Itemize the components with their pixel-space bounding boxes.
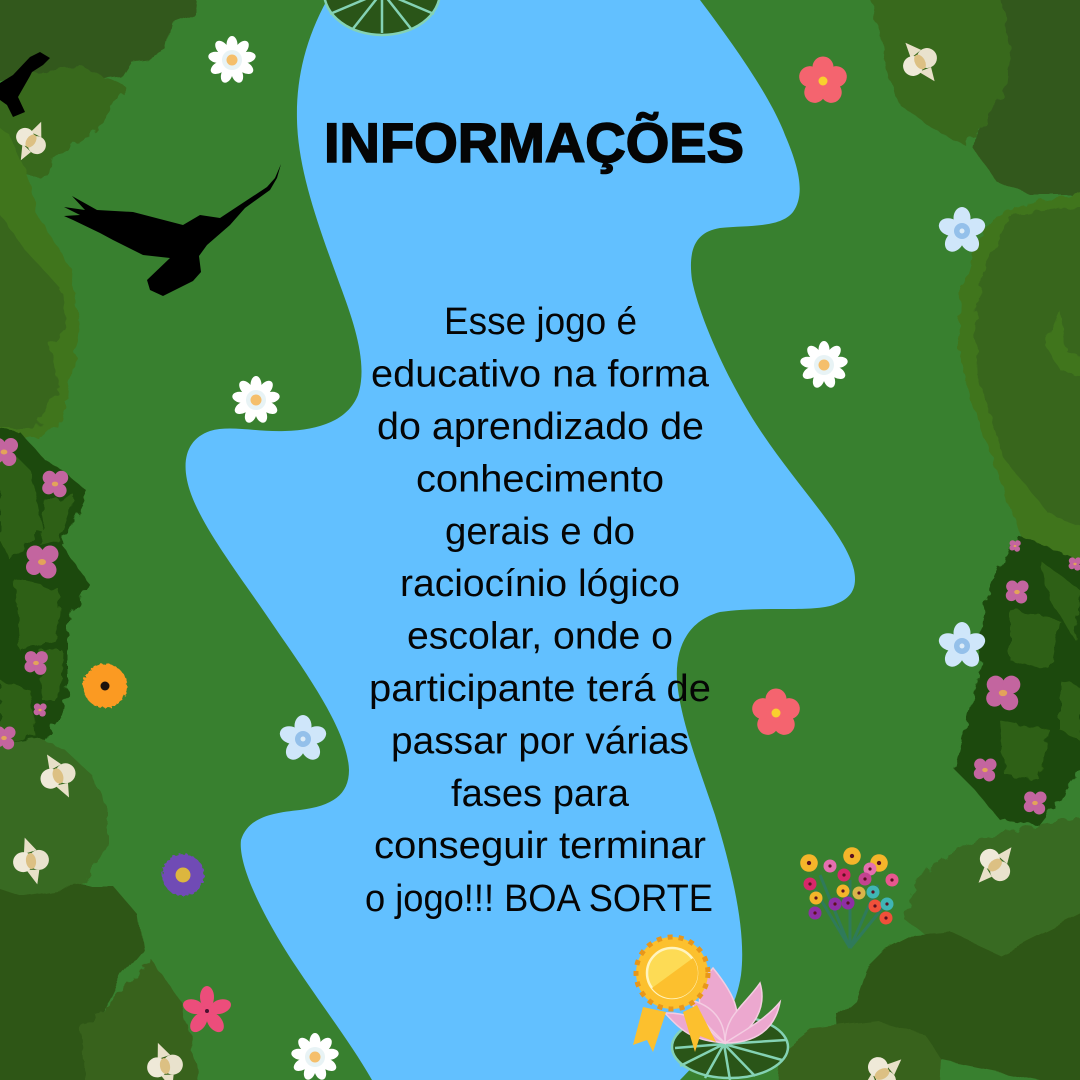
body text: gerais e do [445,511,635,553]
flower: red top right [796,56,850,107]
bird: large silhouette [64,164,281,296]
lily pad: bottom [672,1016,788,1080]
flower: purple aster [162,854,204,896]
flower: red middle [749,688,803,739]
flower: cream left 2 [10,835,52,887]
body text [365,301,713,920]
flower: cream top-left [5,114,57,168]
foliage: left olive bush [0,120,80,440]
flower: blue left [278,715,328,763]
body text: Esse jogo é [444,301,637,343]
flower: orange marigold [83,664,127,708]
title: INFORMAÇÕES [324,111,744,174]
flower bouquet [800,847,898,948]
body text: passar por várias [391,720,689,762]
body text: raciocínio lógico [400,563,680,605]
river [186,0,855,1080]
flower: cream bottom-left [143,1039,187,1080]
lotus flower [665,968,780,1043]
flower: white daisy top-left [207,36,257,84]
foliage: top-right bushes [868,0,1080,195]
foliage: bottom-right bushes [775,815,1080,1080]
flower: cream left 1 [33,747,83,805]
flower: blue upper right [937,207,987,255]
body text: escolar, onde o [407,616,673,658]
flower: white daisy bottom [290,1033,340,1080]
flower: pink star [181,986,233,1035]
lily pad: top [324,0,440,35]
bird: small silhouette top-left [0,52,50,117]
foliage: right flowering bush [955,535,1080,825]
award medal [633,937,716,1052]
flower: white daisy mid-left [231,376,281,424]
body text: conhecimento [416,458,664,500]
flower: cream bottom-right [852,1046,912,1080]
body text: participante terá de [369,668,711,710]
body text: conseguir terminar [374,825,706,867]
flower: cream top-right [892,32,948,92]
flowers: pink on left bush [0,438,68,750]
body text: o jogo!!! BOA SORTE [365,878,713,920]
flower: white daisy right [799,341,849,389]
foliage: left flowering bush [0,428,90,755]
body text: educativo na forma [371,354,710,396]
flower: cream right [965,836,1025,894]
flowers: pink on right bush [974,540,1080,815]
foliage: right olive bush [958,190,1080,570]
flower: blue lower right [937,622,987,670]
body text: do aprendizado de [377,406,704,448]
body text: fases para [451,773,630,815]
foliage: top-left bushes [0,0,197,176]
foliage: bottom-left bushes [0,738,200,1080]
